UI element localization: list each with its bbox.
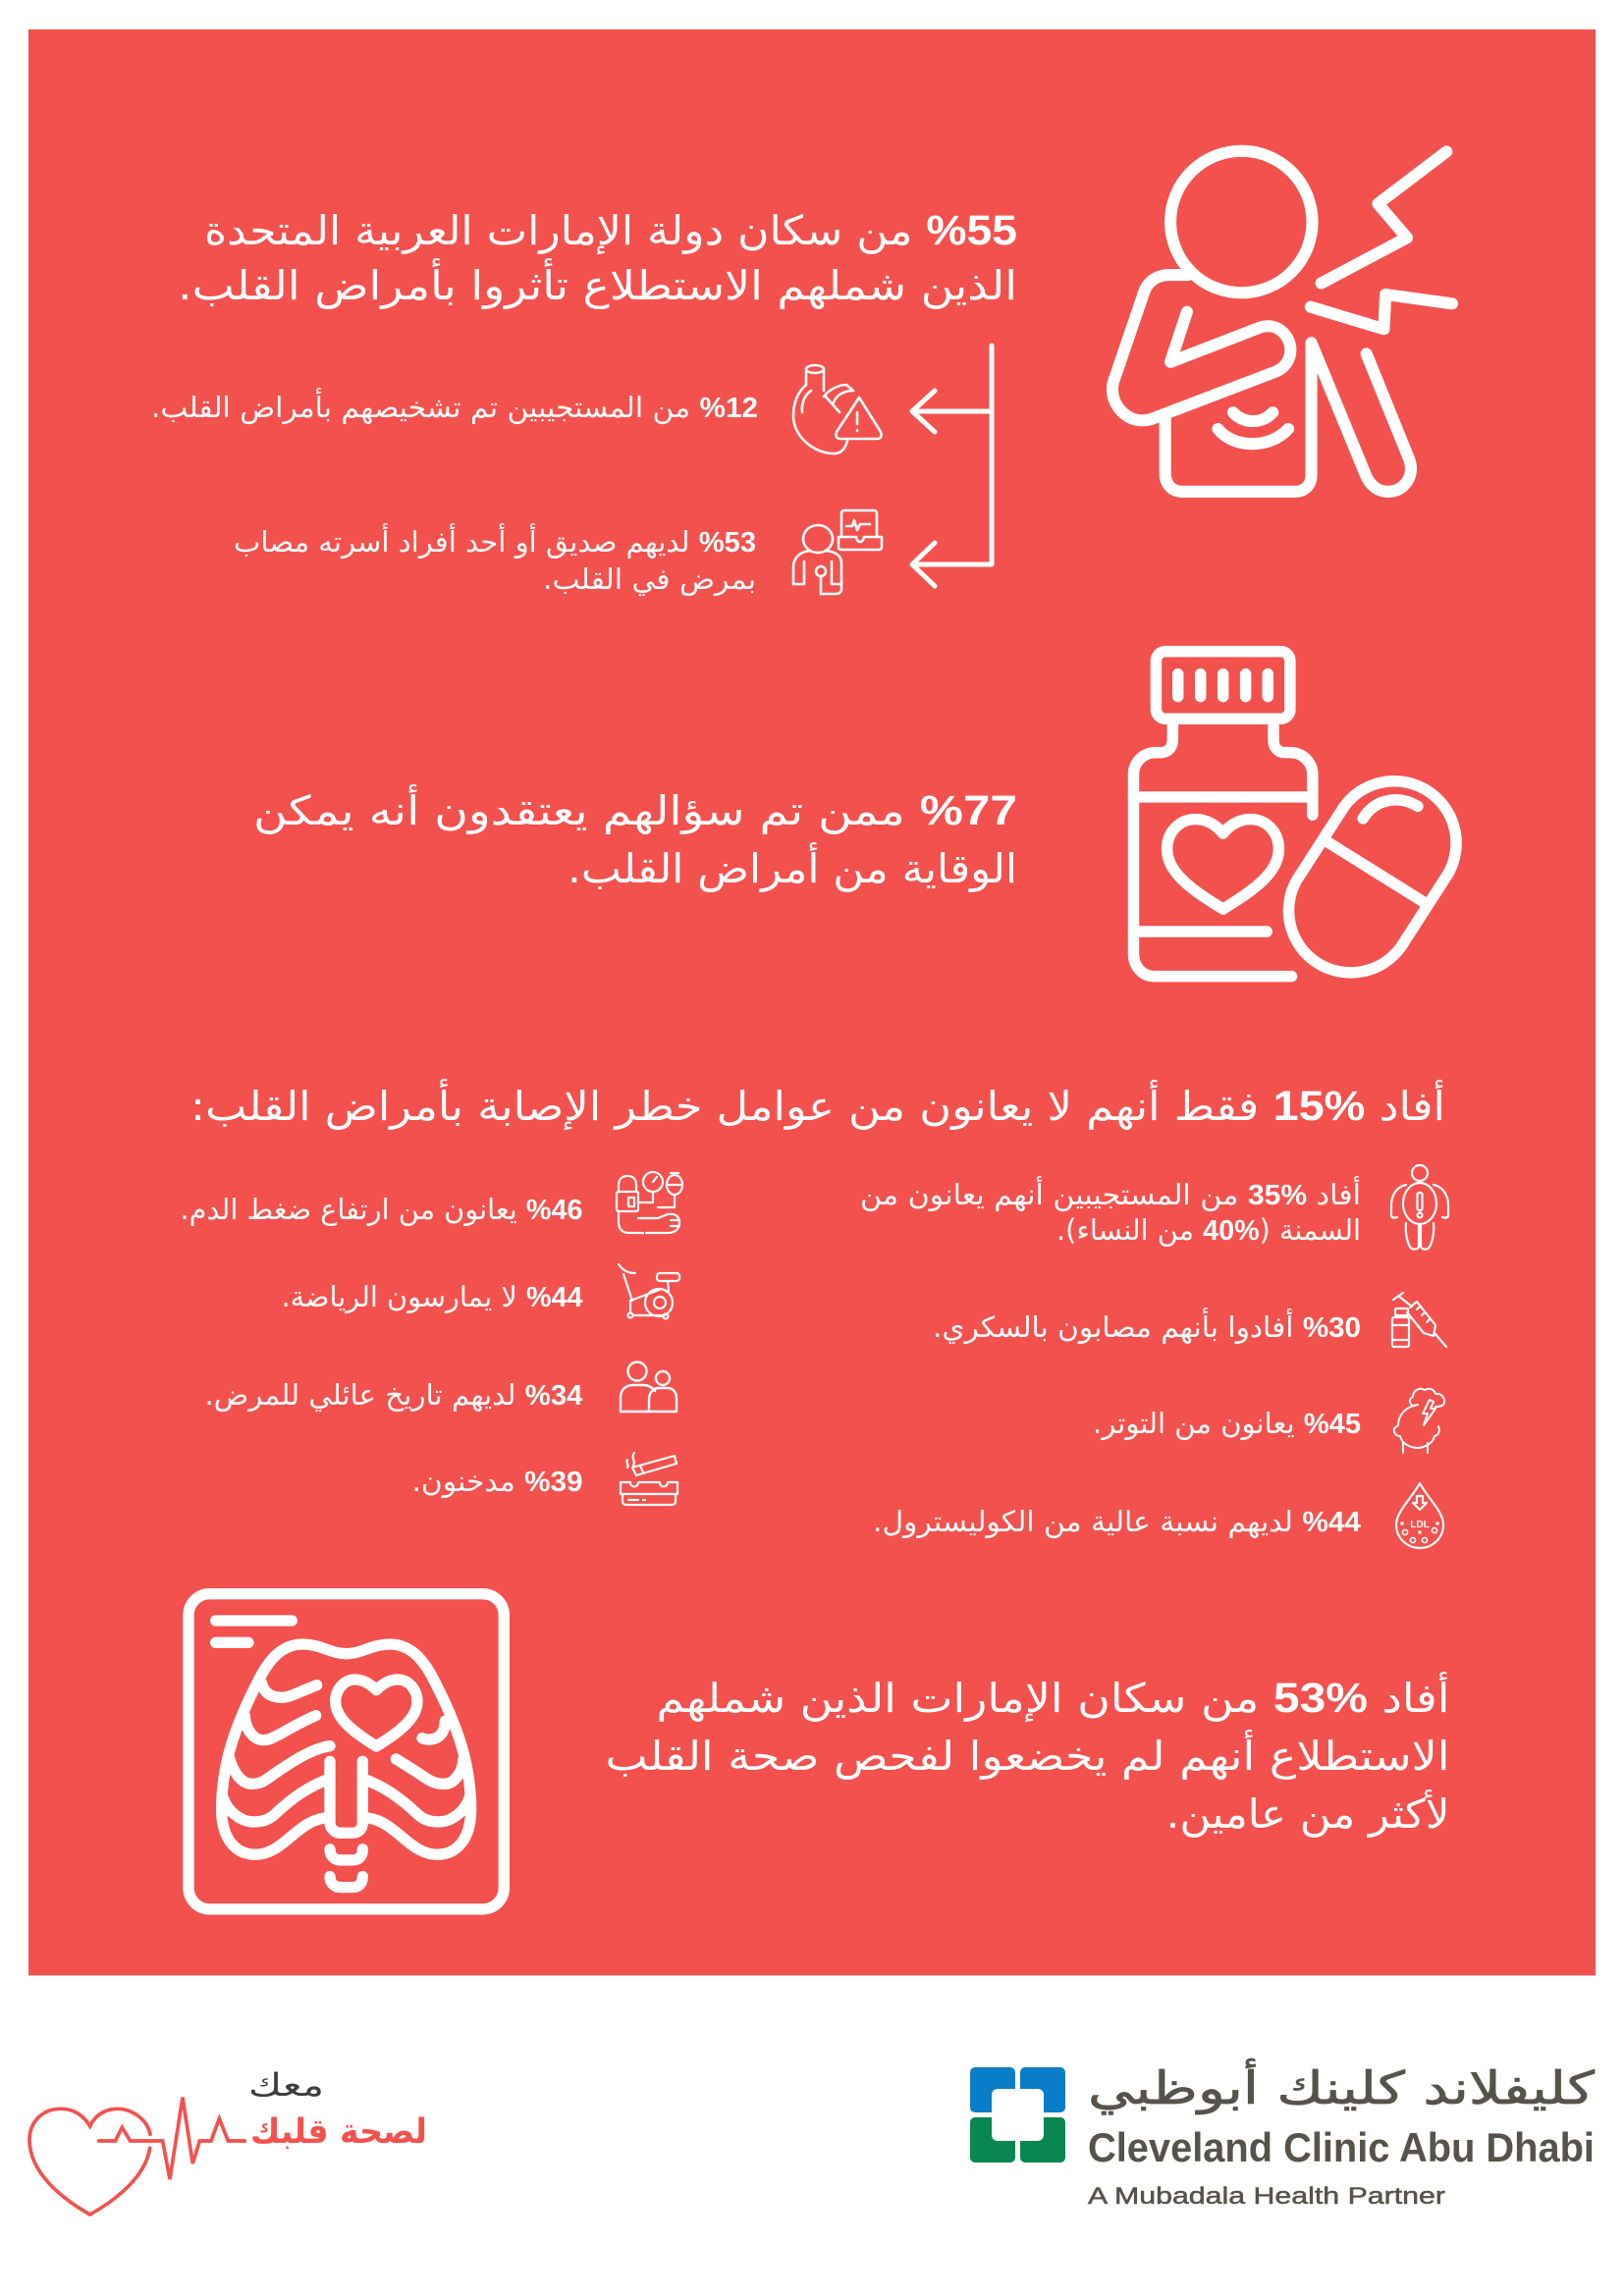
text: English name: Cleveland Clinic Abu Dhabi xyxy=(1088,2124,1595,2170)
icon: exercise bike xyxy=(619,1264,679,1319)
text: 35% obese: أفاد %35 من المستجيبين أنهم يعانون من xyxy=(860,1175,1361,1212)
icon: obese person xyxy=(1391,1165,1448,1250)
icon: chest x-ray xyxy=(189,1594,504,1909)
list: right column risk factors: السمنة (%40 من النساء). xyxy=(1056,1213,1361,1247)
text: 53% have not had a heart check xyxy=(605,1672,1449,1838)
heading: 55% of UAE residents: الذين شملهم الاستطلاع تأثروا بأمراض القلب. xyxy=(178,258,1017,309)
list: right column risk factors xyxy=(860,1165,1448,1548)
icon: person with chest pain xyxy=(1112,151,1452,492)
text: 53% know someone: بمرض في القلب. xyxy=(543,562,756,597)
icon: LDL cholesterol drop: LDL xyxy=(1410,1520,1430,1530)
text: 53% know someone xyxy=(234,522,756,597)
icon: insulin syringe and vial xyxy=(1392,1293,1446,1347)
text: 53% have not had a heart check: الاستطلاع أنهم لم يخضعوا لفحص صحة القلب xyxy=(605,1730,1449,1780)
text: 46% high blood pressure: %46 يعانون من ارتفاع ضغط الدم. xyxy=(181,1193,583,1226)
arrows: connector to sub-statistics xyxy=(912,346,992,586)
icon: family members xyxy=(621,1362,677,1412)
heading: 77% believe prevention: الوقاية من أمراض القلب. xyxy=(568,842,1017,892)
icon: medicine bottle and capsule xyxy=(1133,652,1456,977)
text: 53% know someone: %53 لديهم صديق أو أحد أفراد أسرته مصاب xyxy=(234,522,756,560)
heading: 77% believe prevention xyxy=(253,784,1017,892)
heading: only 15% free of risk factors: أفاد %15 فقط أنهم لا يعانون من عوامل خطر الإصابة بأمراض القلب: xyxy=(190,1079,1445,1130)
text: 39% smokers: %39 مدخنون. xyxy=(412,1465,583,1498)
text: Arabic name: كليفلاند كلينك أبوظبي xyxy=(1088,2058,1595,2115)
text: 30% diabetic: %30 أفادوا بأنهم مصابون بالسكري. xyxy=(933,1307,1361,1345)
icon: person with stethoscope and monitor xyxy=(793,510,882,594)
heading: 55% of UAE residents: %55 من سكان دولة الإمارات العربية المتحدة xyxy=(204,207,1017,254)
text: 45% stress: %45 يعانون من التوتر. xyxy=(1093,1407,1361,1440)
logo: Cleveland Clinic Abu Dhabi xyxy=(970,2058,1595,2210)
text: 12% diagnosed: %12 من المستجيبين تم تشخيصهم بأمراض القلب. xyxy=(151,387,758,425)
icon: heart with warning xyxy=(793,365,882,454)
heading: 77% believe prevention: %77 ممن تم سؤالهم يعتقدون أنه يمكن xyxy=(253,784,1017,834)
logo: with you for your heart health xyxy=(29,2066,427,2215)
text: with you: معك xyxy=(248,2066,324,2104)
text: 34% family history: %34 لديهم تاريخ عائلي للمرض. xyxy=(204,1378,583,1413)
icon: cigarette and ashtray xyxy=(621,1453,677,1505)
text: 53% have not had a heart check: لأكثر من عامين. xyxy=(1166,1789,1449,1838)
icon: heart with ECG line xyxy=(29,2098,246,2215)
text: 44% cholesterol: %44 لديهم نسبة عالية من الكوليسترول. xyxy=(873,1505,1361,1539)
icon: four-tile cross mark xyxy=(970,2067,1065,2163)
list: left column risk factors xyxy=(181,1172,682,1505)
text: for your heart health: لصحة قلبك xyxy=(250,2112,427,2152)
icon: blood pressure cuff xyxy=(617,1172,682,1233)
heading: 55% of UAE residents xyxy=(178,207,1017,309)
icon: stressed head xyxy=(1394,1389,1444,1453)
text: 44% do not exercise: %44 لا يمارسون الرياضة. xyxy=(281,1280,583,1313)
text: partner line: A Mubadala Health Partner xyxy=(1088,2183,1445,2210)
icon: LDL cholesterol drop xyxy=(1396,1483,1443,1548)
text: 53% have not had a heart check: أفاد %53 من سكان الإمارات الذين شملهم xyxy=(656,1672,1449,1722)
